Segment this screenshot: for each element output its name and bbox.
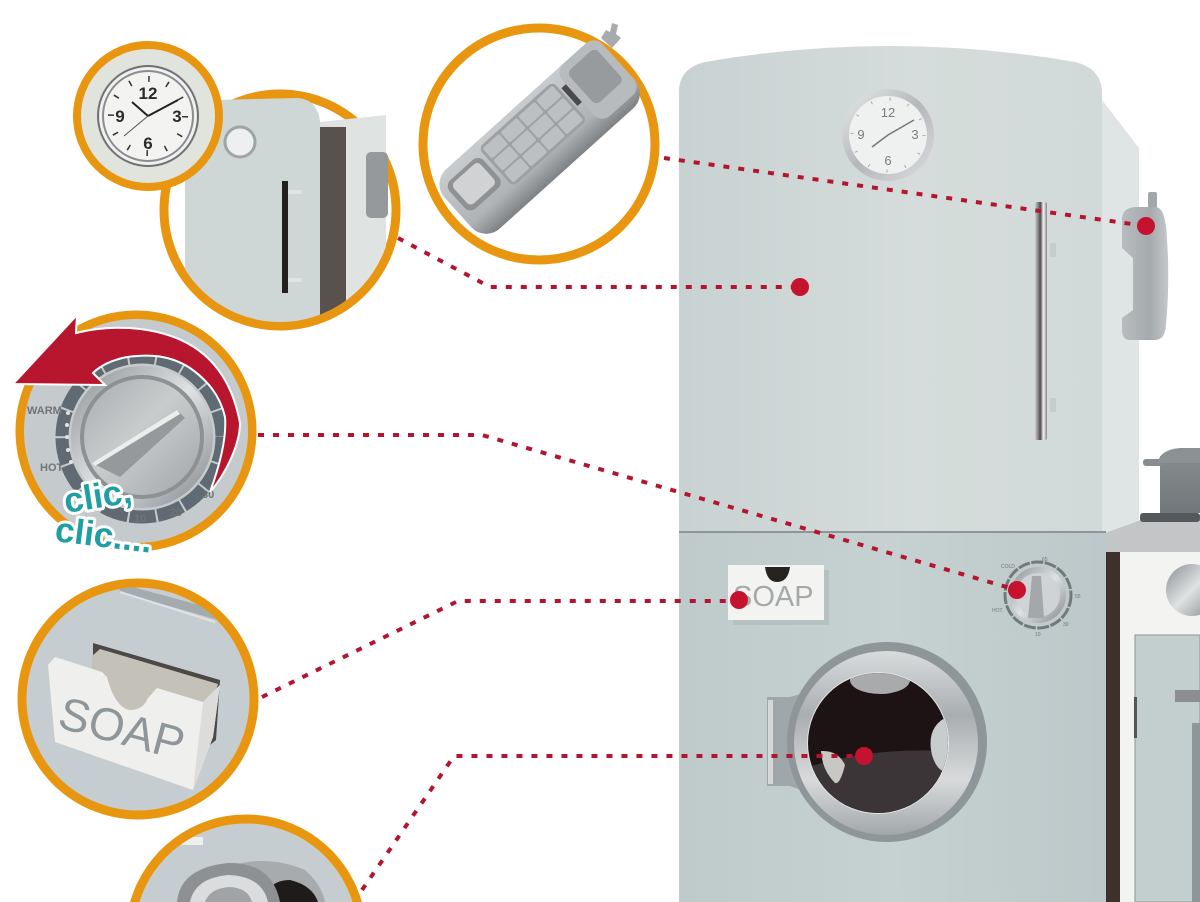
- callout: dial: 30: [202, 489, 214, 501]
- clock: 9: [857, 127, 865, 142]
- line: soap: [262, 601, 739, 697]
- neighbouring kitchen unit: [1105, 448, 1200, 902]
- fridge side panel: [1102, 100, 1139, 533]
- temperature dial: 65: [1042, 557, 1048, 563]
- label: click text: clic....: [53, 510, 154, 561]
- washer lower panel: [679, 533, 1106, 902]
- temperature dial: COLD: [1001, 564, 1015, 570]
- temperature dial: 30: [1063, 622, 1069, 628]
- callout: fridge: [164, 94, 396, 330]
- washer door: [767, 642, 987, 842]
- clock: [842, 89, 934, 181]
- callout: soap drawer: SOAP: [53, 686, 190, 770]
- clock: 12: [881, 105, 895, 120]
- callout: soap drawer: [22, 583, 254, 815]
- temperature dial: 55: [1075, 594, 1081, 600]
- callout: clock badge: 3: [172, 107, 182, 126]
- clock: 3: [911, 127, 919, 142]
- callout: clock badge: 9: [115, 107, 125, 126]
- icon: phone handset: [431, 23, 648, 242]
- callout: dial: [13, 315, 252, 561]
- fridge handle: [1035, 202, 1056, 440]
- temperature dial: 10: [1035, 632, 1041, 638]
- wall phone: [1122, 192, 1168, 340]
- callout: dial: HOT: [40, 462, 64, 474]
- label: click text: [53, 472, 154, 561]
- connector lines: [258, 158, 1146, 890]
- line: drum: [362, 756, 864, 890]
- line: dial: [258, 435, 1017, 590]
- callout: clock badge: [77, 45, 219, 187]
- callout: telephone: [423, 23, 655, 260]
- appliance: main product: [679, 46, 1200, 902]
- label: click text: clic,: [61, 472, 135, 521]
- marker dots: [730, 217, 1155, 765]
- soap drawer: SOAP: [733, 581, 814, 613]
- line: fridge: [398, 238, 800, 287]
- callout: dial: 20: [170, 507, 182, 519]
- soap drawer: [728, 565, 829, 625]
- temperature dial: [992, 557, 1081, 638]
- line: telephone: [664, 158, 1146, 226]
- arrow: turn direction: [13, 315, 240, 492]
- callout: dial: WARM: [27, 405, 62, 417]
- fridge upper door: [679, 46, 1102, 532]
- callout: dial: 10: [134, 513, 146, 525]
- callout: washer drum: [130, 814, 362, 902]
- callout: clock badge: 12: [139, 84, 157, 103]
- temperature dial: HOT: [992, 608, 1003, 614]
- clock: 6: [884, 153, 892, 168]
- callout: clock badge: 6: [143, 134, 153, 153]
